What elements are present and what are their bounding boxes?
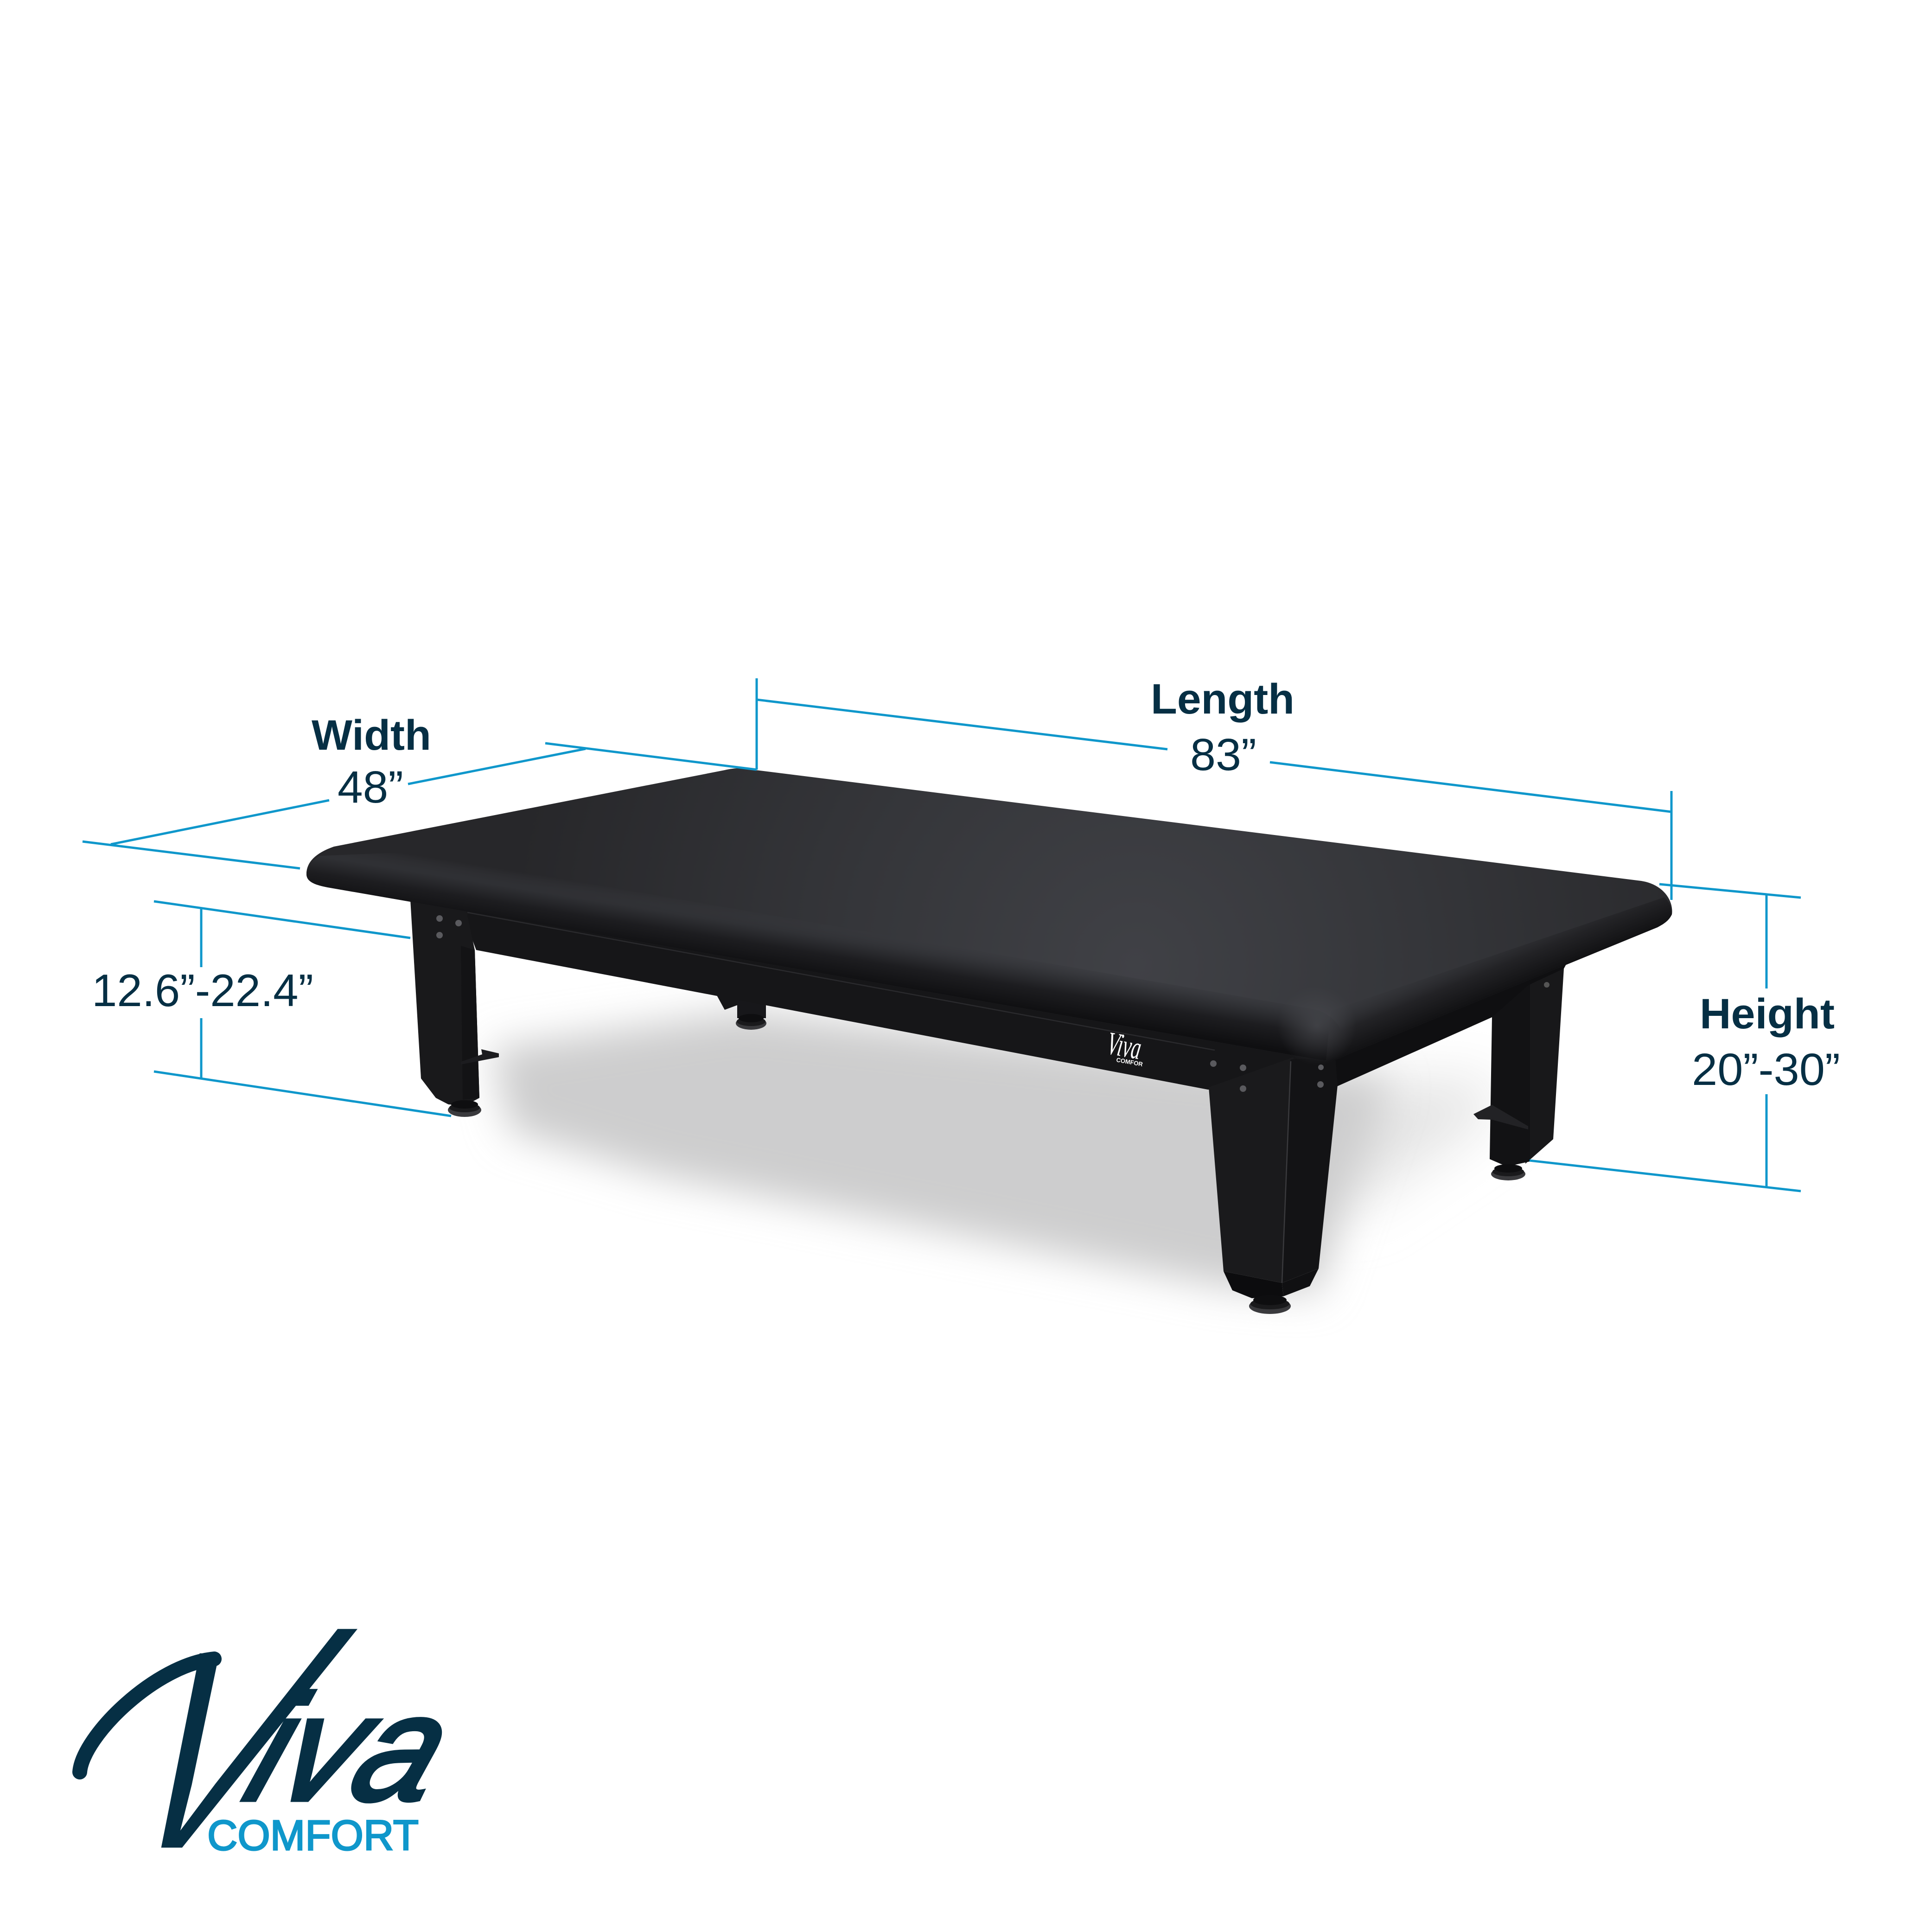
leg bracket [1473, 1105, 1528, 1129]
value: leg height: 12.6”-22.4” [92, 965, 313, 1016]
dimension: height [1530, 884, 1801, 1191]
logo comfort: COMFORT [207, 1812, 419, 1859]
foot [1249, 1298, 1291, 1314]
logo flourish [80, 1659, 214, 1772]
centre front leg [1209, 1057, 1338, 1314]
floor shadow [491, 1011, 1498, 1294]
back centre foot [716, 995, 766, 1030]
leg bracket [461, 1049, 499, 1065]
front rail [459, 904, 1326, 1092]
front padded edge [306, 852, 1347, 1060]
logo V: V [56, 1556, 399, 1919]
rail logo: Viva [1104, 1026, 1144, 1066]
side padded edge [1326, 897, 1672, 1061]
tabletop [306, 768, 1672, 1065]
value: length: 83” [1190, 729, 1256, 780]
left front leg [410, 899, 499, 1117]
corner highlight [1277, 986, 1356, 1065]
label: height: Height [1700, 990, 1835, 1038]
side rail [1317, 946, 1576, 1086]
rail logo: COMFOR [1116, 1056, 1144, 1068]
dimension: width [83, 743, 757, 868]
label: width: Width [312, 712, 431, 759]
logo iva: iva [229, 1664, 473, 1832]
dimension: leg height [154, 901, 451, 1116]
infographic canvas [72, 678, 1839, 1851]
value: width: 48” [338, 762, 403, 812]
logo: Viva Comfort [56, 1556, 473, 1919]
value: height: 20”-30” [1692, 1044, 1840, 1095]
label: length: Length [1151, 676, 1294, 723]
dimension: length [757, 678, 1671, 900]
right back leg [1473, 964, 1564, 1180]
